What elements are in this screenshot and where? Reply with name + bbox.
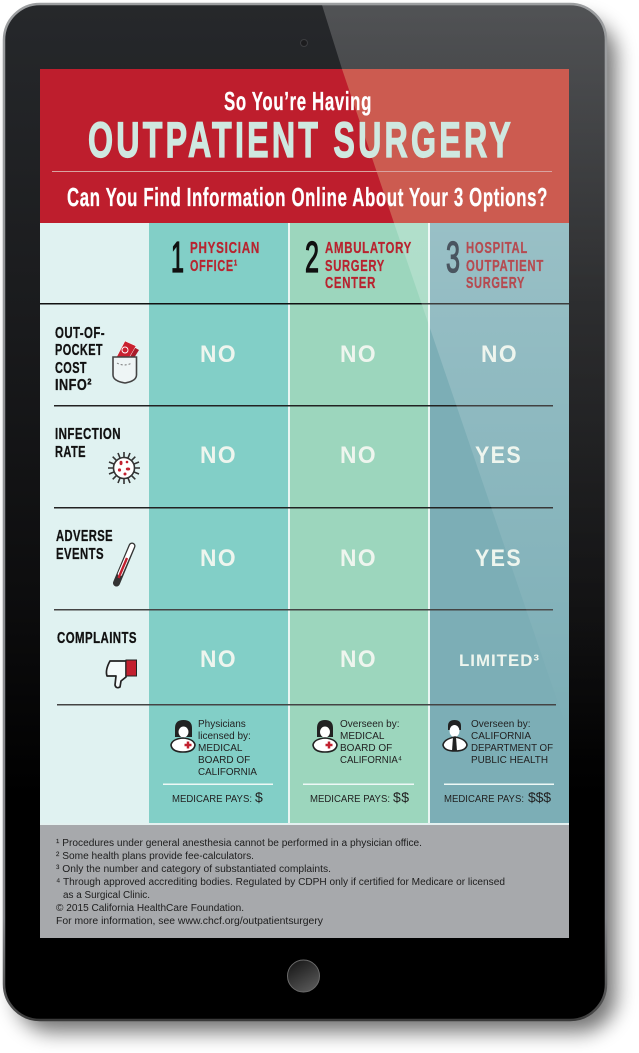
icon: thermometer bbox=[116, 546, 132, 583]
home button bbox=[288, 960, 320, 992]
oversight text: Overseen by: bbox=[340, 719, 399, 730]
oversight text: Overseen by: bbox=[471, 719, 530, 730]
cell values bbox=[200, 442, 522, 469]
cell values: NO bbox=[481, 341, 518, 368]
row label bbox=[55, 325, 105, 394]
cell values bbox=[200, 545, 522, 572]
footnote text: ⁴ Through approved accrediting bodies. Regulated by CDPH only if certified for Medicare or licensed bbox=[56, 877, 505, 888]
medicare pays: $$$ bbox=[528, 789, 551, 805]
oversight text: BOARD OF bbox=[340, 743, 392, 754]
oversight text: DEPARTMENT OF bbox=[471, 743, 553, 754]
footnotes panel bbox=[40, 823, 569, 938]
oversight text: CALIFORNIA bbox=[471, 731, 531, 742]
row label: POCKET bbox=[55, 342, 103, 359]
icon: virus bbox=[108, 452, 140, 484]
row label: COMPLAINTS bbox=[57, 630, 137, 647]
row: out-of-pocket cost info bbox=[55, 325, 518, 394]
column 3 heading: 3 bbox=[446, 233, 460, 282]
column 1 heading: OFFICE¹ bbox=[190, 258, 238, 275]
row label bbox=[55, 426, 121, 461]
column 1 heading: 1 bbox=[171, 233, 184, 282]
row label: INFO² bbox=[55, 377, 92, 394]
row label: OUT-OF- bbox=[55, 325, 105, 342]
column 3 heading bbox=[446, 233, 544, 292]
medicare pays bbox=[310, 789, 409, 805]
oversight text bbox=[340, 719, 402, 766]
medicare pays: MEDICARE PAYS: bbox=[310, 794, 390, 805]
column 3 heading: HOSPITAL bbox=[466, 240, 528, 257]
row label: COST bbox=[55, 360, 87, 377]
column 2 heading: CENTER bbox=[325, 275, 376, 292]
oversight text: licensed by: bbox=[198, 731, 251, 742]
cell values: NO bbox=[200, 341, 237, 368]
column 1 heading: PHYSICIAN bbox=[190, 240, 260, 257]
row label bbox=[56, 528, 113, 563]
icon: money in pocket bbox=[113, 341, 139, 383]
row lines bbox=[40, 303, 569, 706]
cell values: NO bbox=[200, 442, 237, 469]
footnote text: ² Some health plans provide fee-calculators. bbox=[56, 851, 254, 862]
footnote text bbox=[56, 838, 505, 927]
row label: RATE bbox=[55, 444, 86, 461]
column 3 heading: OUTPATIENT bbox=[466, 258, 544, 275]
bezel glare bbox=[322, 5, 605, 558]
row: adverse events bbox=[56, 528, 522, 583]
cell values: NO bbox=[340, 646, 377, 673]
column 1 heading bbox=[171, 233, 260, 282]
oversight text: MEDICAL bbox=[340, 731, 385, 742]
column 2 heading: AMBULATORY bbox=[325, 240, 412, 257]
oversight: hospital outpatient surgery bbox=[443, 719, 554, 805]
cell values: NO bbox=[340, 545, 377, 572]
screen: infographic bbox=[40, 69, 569, 938]
title line 1: So You’re Having bbox=[224, 86, 372, 116]
footnote text: ¹ Procedures under general anesthesia cannot be performed in a physician office. bbox=[56, 838, 422, 849]
medicare pays bbox=[444, 789, 551, 805]
cell values bbox=[200, 341, 518, 368]
row: complaints bbox=[57, 630, 540, 688]
cell values: YES bbox=[475, 442, 522, 469]
row: infection rate bbox=[55, 426, 522, 484]
table background columns bbox=[40, 223, 569, 823]
oversight text bbox=[471, 719, 553, 766]
header glare bbox=[342, 69, 569, 223]
oversight text: BOARD OF bbox=[198, 755, 250, 766]
row label: EVENTS bbox=[56, 546, 104, 563]
cell values: NO bbox=[340, 442, 377, 469]
oversight text: CALIFORNIA⁴ bbox=[340, 755, 402, 766]
oversight text: CALIFORNIA bbox=[198, 767, 257, 778]
oversight: physician office bbox=[163, 719, 273, 805]
row label: ADVERSE bbox=[56, 528, 113, 545]
icon: female doctor bbox=[171, 720, 195, 752]
medicare pays: MEDICARE PAYS: bbox=[172, 794, 252, 805]
oversight text bbox=[198, 719, 257, 778]
row label: INFECTION bbox=[55, 426, 121, 443]
footnote text: © 2015 California HealthCare Foundation. bbox=[56, 903, 244, 914]
icon: female doctor bbox=[313, 720, 337, 752]
oversight: ambulatory surgery center bbox=[303, 719, 414, 805]
table glare bbox=[394, 223, 569, 735]
cell values: LIMITED³ bbox=[459, 651, 540, 670]
footnote text: as a Surgical Clinic. bbox=[63, 890, 150, 901]
column 2 heading: SURGERY bbox=[325, 258, 385, 275]
cell values bbox=[200, 646, 540, 673]
column 3 heading: SURGERY bbox=[466, 275, 525, 292]
cell values: NO bbox=[200, 545, 237, 572]
camera bbox=[300, 40, 308, 46]
footnote text: For more information, see www.chcf.org/outpatientsurgery bbox=[56, 916, 323, 927]
footnote text: ³ Only the number and category of substantiated complaints. bbox=[56, 864, 331, 875]
cell values: NO bbox=[200, 646, 237, 673]
cell values: YES bbox=[475, 545, 522, 572]
icon: male doctor bbox=[443, 720, 467, 751]
medicare pays: MEDICARE PAYS: bbox=[444, 794, 524, 805]
oversight text: Physicians bbox=[198, 719, 246, 730]
header panel bbox=[40, 69, 569, 223]
oversight text: MEDICAL bbox=[198, 743, 243, 754]
column 2 heading bbox=[305, 233, 412, 292]
medicare pays: $ bbox=[255, 789, 263, 805]
medicare pays: $$ bbox=[393, 789, 409, 805]
oversight text: PUBLIC HEALTH bbox=[471, 755, 548, 766]
column 2 heading: 2 bbox=[305, 233, 319, 282]
cell values: NO bbox=[340, 341, 377, 368]
icon: thumbs down bbox=[106, 660, 136, 688]
medicare pays bbox=[172, 789, 263, 805]
